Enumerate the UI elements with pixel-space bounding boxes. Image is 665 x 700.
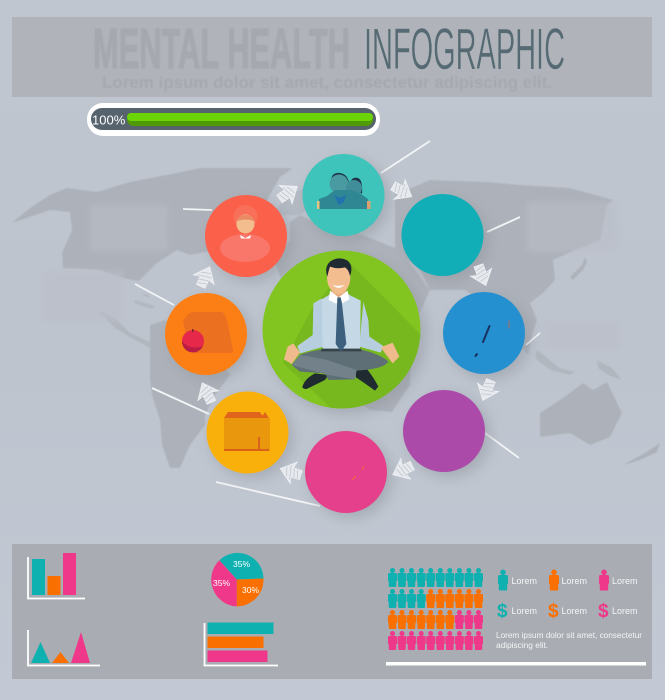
legend: Lorem: [512, 606, 537, 616]
horizontal bar chart: [204, 622, 278, 666]
japan: [570, 257, 587, 280]
central america: [97, 310, 150, 348]
legend: Lorem: [562, 606, 587, 616]
faded map captions: [42, 202, 620, 350]
progress bar: [87, 103, 380, 136]
icon: person: [220, 205, 270, 262]
pie labels: 35%: [233, 559, 250, 569]
row 1: [388, 568, 483, 587]
pie labels: [213, 559, 259, 595]
progress label: 100%: [92, 112, 126, 128]
caption: adipiscing elit.: [496, 640, 548, 650]
sleeves: [297, 298, 383, 353]
row 4: [388, 631, 483, 650]
icon: hugging people: [317, 173, 370, 209]
legend: Lorem: [612, 576, 638, 586]
circle: teal: [402, 194, 484, 276]
caption: Lorem ipsum dolor sit amet, consectetur: [496, 630, 642, 640]
legend: [497, 570, 638, 622]
long shadow: [283, 263, 423, 410]
tie: [336, 297, 346, 352]
connector lines: [135, 141, 540, 506]
icon: shape behind apple: [183, 312, 233, 353]
legend: Lorem: [562, 576, 587, 586]
header band: [12, 17, 652, 97]
pie labels: 30%: [242, 585, 259, 595]
people pictogram: [388, 568, 483, 650]
white rule: [386, 662, 646, 666]
circle: pink: [305, 431, 387, 513]
bar chart: [28, 553, 85, 598]
legend: $: [497, 601, 508, 622]
circle: blue: [443, 292, 525, 374]
circle: person: [205, 195, 287, 277]
legend: Lorem: [612, 606, 638, 616]
world map: [12, 168, 660, 468]
north america: [12, 168, 293, 281]
indonesia: [535, 350, 622, 380]
icon marks: [352, 466, 364, 480]
center circle: [262, 250, 423, 410]
europe and africa: [275, 215, 430, 412]
circle: purple: [403, 390, 485, 472]
new zealand: [623, 443, 660, 465]
australia: [540, 382, 622, 445]
caption: [496, 630, 642, 650]
subtitle: Lorem ipsum dolor sit amet, consectetur adipiscing elit.: [102, 73, 552, 92]
icon: box: [224, 412, 270, 451]
torso: [322, 294, 361, 350]
legend: Lorem: [512, 576, 537, 586]
caribbean islands: [134, 292, 155, 309]
hands: [284, 343, 399, 364]
circle: yellow: [206, 392, 288, 474]
icon marks: [476, 321, 509, 356]
pants: [292, 349, 388, 380]
icon: apple: [182, 329, 204, 352]
neck and face: [332, 283, 346, 300]
bottom panel: [12, 544, 652, 679]
pie labels: 35%: [213, 578, 230, 588]
title: mental health: MENTAL HEALTH: [93, 17, 350, 81]
circle: orange: [165, 293, 247, 375]
circle: team: [302, 154, 384, 236]
row 2: [388, 589, 483, 608]
circle shadows: [170, 159, 530, 518]
triangle chart: [28, 630, 100, 666]
row 3: [388, 610, 483, 629]
asia: [395, 180, 613, 355]
south america: [150, 320, 230, 468]
shoes: [302, 367, 378, 391]
arrows: [191, 176, 501, 486]
legend: $: [548, 601, 559, 622]
hair: [326, 258, 351, 277]
figure: meditating man: [284, 258, 399, 391]
collar: [329, 291, 349, 303]
legend: $: [598, 601, 609, 622]
pie chart: [211, 553, 264, 606]
